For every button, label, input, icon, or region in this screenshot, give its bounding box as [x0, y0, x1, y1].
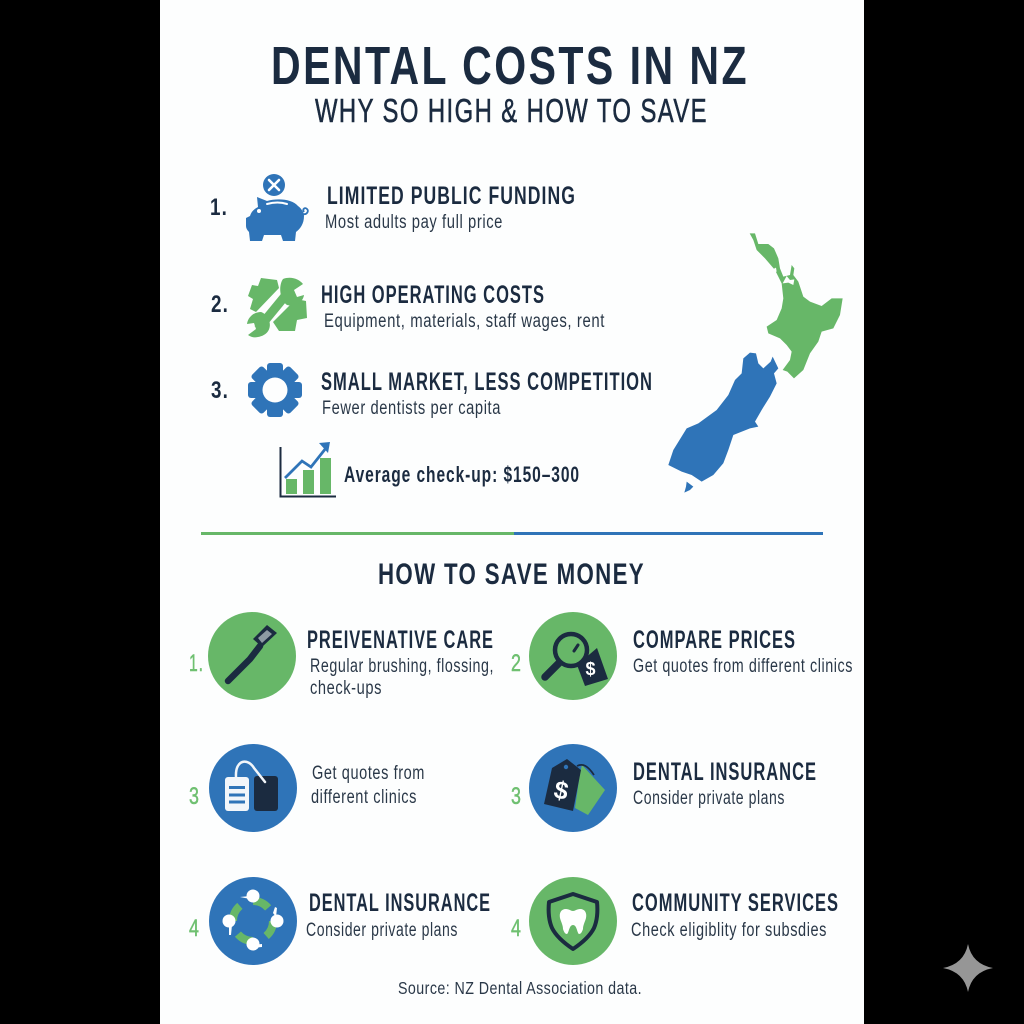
North Island harbour gaps: [773, 268, 794, 285]
divider: [201, 532, 823, 535]
map of New Zealand: [668, 233, 843, 493]
panel: why costs are high: [210, 174, 653, 496]
icon: rising bar chart: [280, 442, 336, 496]
cause 1: limited public funding: Most adults pay full price: [325, 212, 503, 233]
cause 2: high operating costs: [211, 278, 605, 337]
icon: connected cycle: [209, 877, 297, 965]
cause 3: small market: 3.: [211, 377, 229, 404]
tip: dental insurance (cycle): Consider private plans: [306, 920, 458, 941]
cause 2: high operating costs: 2.: [211, 291, 229, 318]
tip: preventative care: Regular brushing, flossing,: [310, 656, 494, 677]
cause 3: small market: SMALL MARKET, LESS COMPETITION: [321, 368, 653, 396]
section heading: HOW TO SAVE MONEY: [378, 558, 645, 591]
Stewart Island: [684, 482, 693, 493]
icon: blue gear: [248, 363, 302, 417]
cause 3: small market: [211, 363, 653, 419]
tip: compare prices: 2: [511, 650, 522, 677]
icon: shield with tooth: [529, 877, 617, 965]
tip: dental insurance (tags): DENTAL INSURANCE: [633, 758, 817, 786]
icon: price tags: $: [551, 776, 572, 806]
cause 3: small market: Fewer dentists per capita: [322, 398, 501, 419]
tip: community services: COMMUNITY SERVICES: [632, 889, 839, 917]
tip: get quotes: different clinics: [311, 787, 417, 808]
icon: green wrench and gear: [247, 278, 307, 337]
cause 1: limited public funding: 1.: [210, 194, 228, 221]
tip: get quotes: 3: [189, 783, 200, 810]
tip: get quotes: [189, 744, 425, 832]
tip: compare prices: Get quotes from different clinics: [633, 656, 853, 677]
cause 1: limited public funding: [210, 174, 576, 241]
icon: tag and document: [209, 744, 297, 832]
tip: dental insurance (cycle): [189, 877, 491, 965]
average check-up callout: [280, 442, 580, 496]
tip: dental insurance (cycle): DENTAL INSURANCE: [309, 889, 491, 917]
icon: toothbrush: [208, 612, 296, 700]
tip: preventative care: check-ups: [310, 678, 382, 699]
tip: preventative care: PREIVENATIVE CARE: [307, 626, 494, 654]
cause 2: high operating costs: Equipment, materials, staff wages, rent: [324, 311, 605, 332]
cause 2: high operating costs: HIGH OPERATING COSTS: [321, 281, 545, 309]
icon: price tags: [529, 744, 617, 832]
title: [271, 36, 749, 129]
tip: dental insurance (cycle): 4: [189, 915, 200, 942]
icon: magnifier and price tag: [529, 612, 617, 700]
tip: community services: Check eligiblity for subsdies: [631, 920, 827, 941]
cause 1: limited public funding: LIMITED PUBLIC FUNDING: [327, 182, 576, 210]
icon: piggy bank with cross coin: [246, 174, 308, 241]
source note: Source: NZ Dental Association data.: [398, 978, 642, 998]
North Island: [750, 233, 843, 378]
average check-up callout: Average check-up: $150–300: [344, 462, 580, 487]
tip: get quotes: Get quotes from: [312, 763, 425, 784]
tip: dental insurance (tags): Consider private plans: [633, 788, 785, 809]
title: DENTAL COSTS IN NZ: [271, 36, 749, 96]
tip: community services: 4: [511, 915, 522, 942]
white page panel: [160, 0, 864, 1024]
tip: preventative care: 1.: [189, 650, 204, 677]
icon: magnifier and price tag: $: [585, 659, 597, 679]
tip: preventative care: [189, 612, 494, 700]
title: WHY SO HIGH & HOW TO SAVE: [315, 92, 708, 129]
tip: dental insurance (tags): 3: [511, 783, 522, 810]
South Island: [668, 353, 778, 482]
icon: watermark star: [943, 944, 993, 992]
tip: compare prices: [511, 612, 853, 700]
panel: how to save money: [189, 612, 853, 965]
tip: compare prices: COMPARE PRICES: [633, 626, 796, 654]
tip: dental insurance (tags): [511, 744, 817, 832]
tip: community services: [511, 877, 839, 965]
